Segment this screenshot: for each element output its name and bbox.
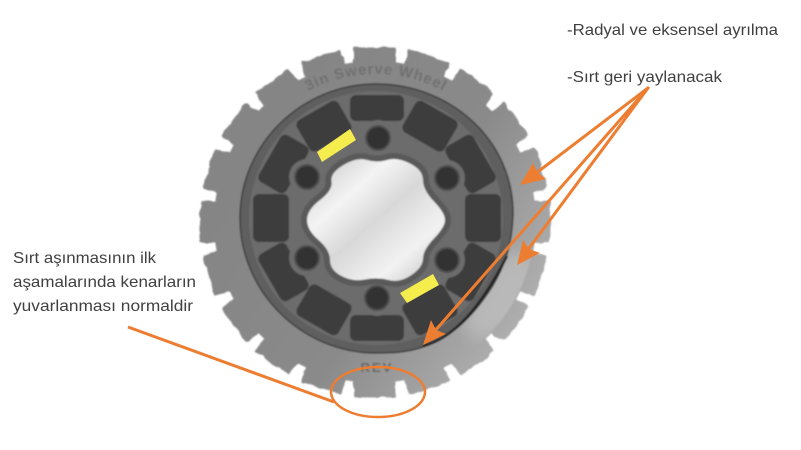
arrow: side tyre: [517, 88, 648, 265]
text: spring back note: -Sırt geri yaylanacak: [567, 69, 723, 86]
hub windows over bosses: [256, 95, 498, 341]
text: wear note: yuvarlanması normaldir: [13, 298, 194, 315]
text: wear note: [13, 250, 196, 315]
embossed wheel label: 3in Swerve Wheel: [305, 66, 447, 90]
hub rim: [240, 84, 513, 353]
text: wear note: aşamalarında kenarların: [13, 274, 196, 291]
hub centre opening: [307, 159, 445, 281]
text: separation note: -Radyal ve eksensel ayrılma: [567, 22, 778, 39]
embossed brand mark: REV: [361, 360, 393, 375]
bolt holes: [295, 126, 459, 310]
hub bolt bosses: [289, 120, 465, 316]
text: wear note: Sırt aşınmasının ilk: [13, 250, 157, 267]
wheel photo: [198, 46, 552, 399]
tyre light wear sheen: [190, 40, 565, 405]
wheel treads: [200, 47, 550, 397]
callout ellipse around worn tread: [331, 367, 425, 417]
arrow: upper rim: [520, 88, 648, 185]
yellow marker: upper: [317, 129, 356, 162]
tyre body: [214, 61, 536, 383]
hub inner face: [249, 91, 503, 345]
yellow marker: lower: [400, 274, 439, 303]
rim separation gap: [423, 256, 507, 346]
worn tyre highlight: [464, 252, 530, 338]
arrow: lower rim: [423, 88, 648, 345]
callout line to worn tread: [128, 327, 334, 402]
hub windows between bosses: [253, 99, 501, 337]
